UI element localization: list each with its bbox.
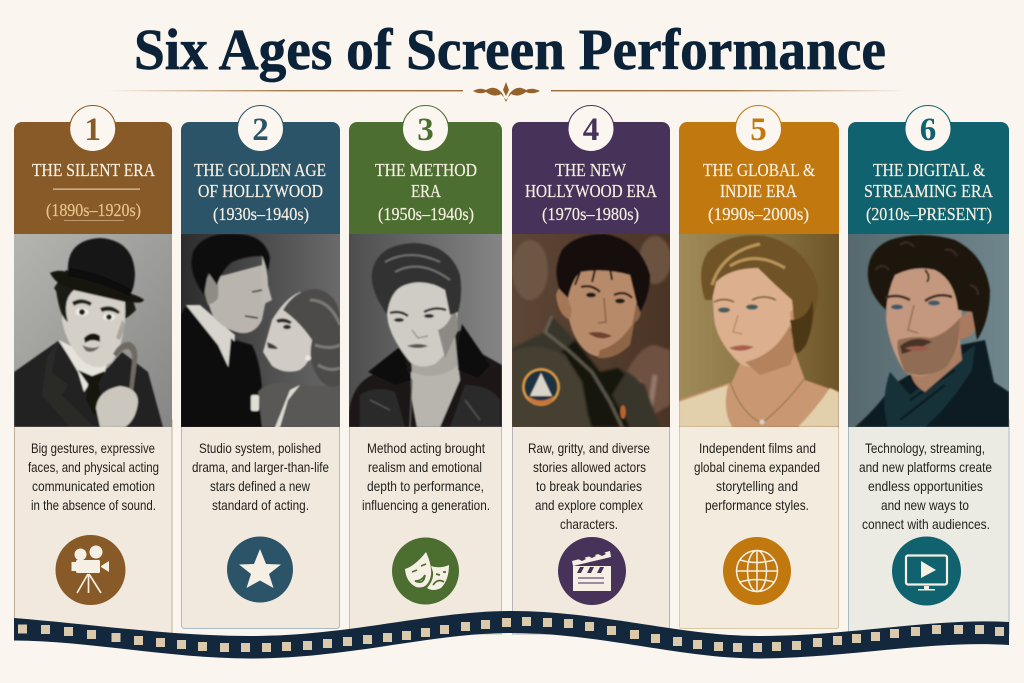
body text: card 3: realism and emotional bbox=[368, 459, 482, 475]
body text: card 6: and new ways to bbox=[881, 497, 969, 513]
card 1 header bbox=[14, 122, 172, 234]
card 3 number badge: 3 bbox=[417, 112, 434, 148]
card 6 title bbox=[864, 160, 993, 201]
card 6 header bbox=[848, 122, 1009, 234]
panel: card 6 digital streaming bbox=[848, 106, 1009, 634]
card 1 body bbox=[14, 420, 172, 634]
body text: card 6: Technology, streaming, bbox=[865, 440, 985, 456]
card 6 number badge bbox=[905, 106, 951, 152]
body text: card 6 bbox=[859, 440, 992, 532]
body text: card 3 bbox=[362, 440, 490, 513]
card 5 title: THE GLOBAL & bbox=[703, 160, 815, 180]
card 4 number badge bbox=[568, 106, 614, 152]
card 1 dates: (1890s–1920s) bbox=[46, 200, 141, 221]
card 6 portrait: curly-haired actor in scarf bbox=[848, 234, 1009, 427]
card 4 title: THE NEW bbox=[555, 160, 626, 180]
icon: clapperboard bbox=[558, 537, 626, 605]
body text: card 4 bbox=[528, 440, 650, 532]
body text: card 5 bbox=[694, 440, 820, 513]
body text: card 1: faces, and physical acting bbox=[28, 459, 159, 475]
card 5 dates: (1990s–2000s) bbox=[708, 204, 809, 225]
body text: card 2: Studio system, polished bbox=[199, 440, 321, 456]
card 6 body bbox=[848, 420, 1009, 634]
card 1 portrait: comic silent actor bbox=[14, 234, 172, 427]
body text: card 1: Big gestures, expressive bbox=[31, 440, 155, 456]
body text: card 1 bbox=[28, 440, 159, 513]
card 2 body bbox=[182, 420, 340, 628]
card 5 title bbox=[703, 160, 815, 201]
card 2 number badge: 2 bbox=[252, 112, 269, 148]
card 2 number badge bbox=[238, 106, 284, 152]
card 4 number badge: 4 bbox=[583, 112, 599, 148]
card 6 dates: (2010s–PRESENT) bbox=[866, 204, 992, 225]
card 4 body bbox=[512, 420, 670, 634]
card 3 title: ERA bbox=[411, 181, 441, 201]
card 4 header bbox=[512, 122, 670, 234]
card 3 number badge bbox=[402, 106, 448, 152]
body text: card 4: characters. bbox=[560, 516, 618, 532]
card 1 title: THE SILENT ERA bbox=[32, 160, 155, 180]
body text: card 4: Raw, gritty, and diverse bbox=[528, 440, 650, 456]
body text: card 2: standard of acting. bbox=[212, 497, 309, 513]
body text: card 2: drama, and larger-than-life bbox=[192, 459, 329, 475]
film strip bbox=[14, 611, 1009, 658]
card 4 dates: (1970s–1980s) bbox=[542, 204, 639, 225]
card 2 header bbox=[181, 122, 340, 234]
title: Six Ages of Screen Performance bbox=[134, 17, 886, 82]
panel: card 2 golden age bbox=[181, 106, 340, 628]
panel: card 1 silent era bbox=[14, 106, 172, 634]
card 2 title: THE GOLDEN AGE bbox=[194, 160, 326, 180]
card 2 title: OF HOLLYWOOD bbox=[198, 181, 323, 201]
body text: card 5: Independent films and bbox=[699, 440, 816, 456]
icon: theatre masks bbox=[392, 538, 459, 604]
body text: card 2: stars defined a new bbox=[210, 478, 311, 494]
icon: streaming screen bbox=[892, 536, 961, 606]
body text: card 6: connect with audiences. bbox=[862, 516, 990, 532]
icon: globe bbox=[723, 537, 791, 605]
icon: star bbox=[227, 536, 293, 602]
card 6 title: STREAMING ERA bbox=[864, 181, 993, 201]
card 3 header bbox=[349, 122, 502, 234]
body text: card 1: in the absence of sound. bbox=[31, 497, 156, 513]
card 2 portrait: classic couple bbox=[181, 234, 340, 430]
card 5 portrait: short-haired actress bbox=[679, 234, 839, 427]
body text: card 3: Method acting brought bbox=[367, 440, 485, 456]
card 5 title: INDIE ERA bbox=[720, 181, 797, 201]
card 5 header bbox=[679, 122, 839, 234]
body text: card 2 bbox=[192, 440, 329, 513]
card 5 number badge: 5 bbox=[750, 112, 767, 148]
card 5 number badge bbox=[736, 106, 782, 152]
card 3 portrait: leather jacket actor bbox=[349, 234, 502, 427]
body text: card 3: depth to performance, bbox=[367, 478, 484, 494]
body text: card 4: and explore complex bbox=[535, 497, 643, 513]
card 2 title bbox=[194, 160, 326, 201]
title ornament divider bbox=[105, 82, 910, 102]
body text: card 4: stories allowed actors bbox=[533, 459, 646, 475]
card 3 title: THE METHOD bbox=[375, 160, 477, 180]
card 4 title bbox=[525, 160, 657, 201]
card 3 dates: (1950s–1940s) bbox=[378, 204, 474, 225]
body text: card 5: global cinema expanded bbox=[694, 459, 820, 475]
body text: card 4: to break boundaries bbox=[536, 478, 642, 494]
card 1 number badge: 1 bbox=[84, 112, 101, 148]
body text: card 1: communicated emotion bbox=[32, 478, 155, 494]
panel: card 4 new hollywood bbox=[512, 106, 671, 634]
card 4 title: HOLLYWOOD ERA bbox=[525, 181, 657, 201]
card 1 date underline bbox=[64, 219, 124, 222]
card 6 title: THE DIGITAL & bbox=[873, 160, 985, 180]
panel: card 3 method era bbox=[349, 106, 502, 634]
icon: film camera bbox=[56, 535, 126, 605]
card 6 number badge: 6 bbox=[920, 112, 936, 148]
body text: card 6: and new platforms create bbox=[859, 459, 992, 475]
card 3 title bbox=[375, 160, 477, 201]
card 1 number badge bbox=[70, 106, 116, 152]
card 3 body bbox=[350, 420, 502, 634]
body text: card 5: storytelling and bbox=[716, 478, 798, 494]
panel: card 5 global indie bbox=[679, 106, 839, 628]
card 5 body bbox=[680, 420, 838, 628]
card 2 dates: (1930s–1940s) bbox=[213, 204, 309, 225]
body text: card 5: performance styles. bbox=[705, 497, 809, 513]
card 1 rule bbox=[53, 189, 140, 190]
body text: card 6: endless opportunities bbox=[868, 478, 983, 494]
body text: card 3: influencing a generation. bbox=[362, 497, 490, 513]
card 4 portrait: flight jacket actor bbox=[512, 234, 671, 427]
